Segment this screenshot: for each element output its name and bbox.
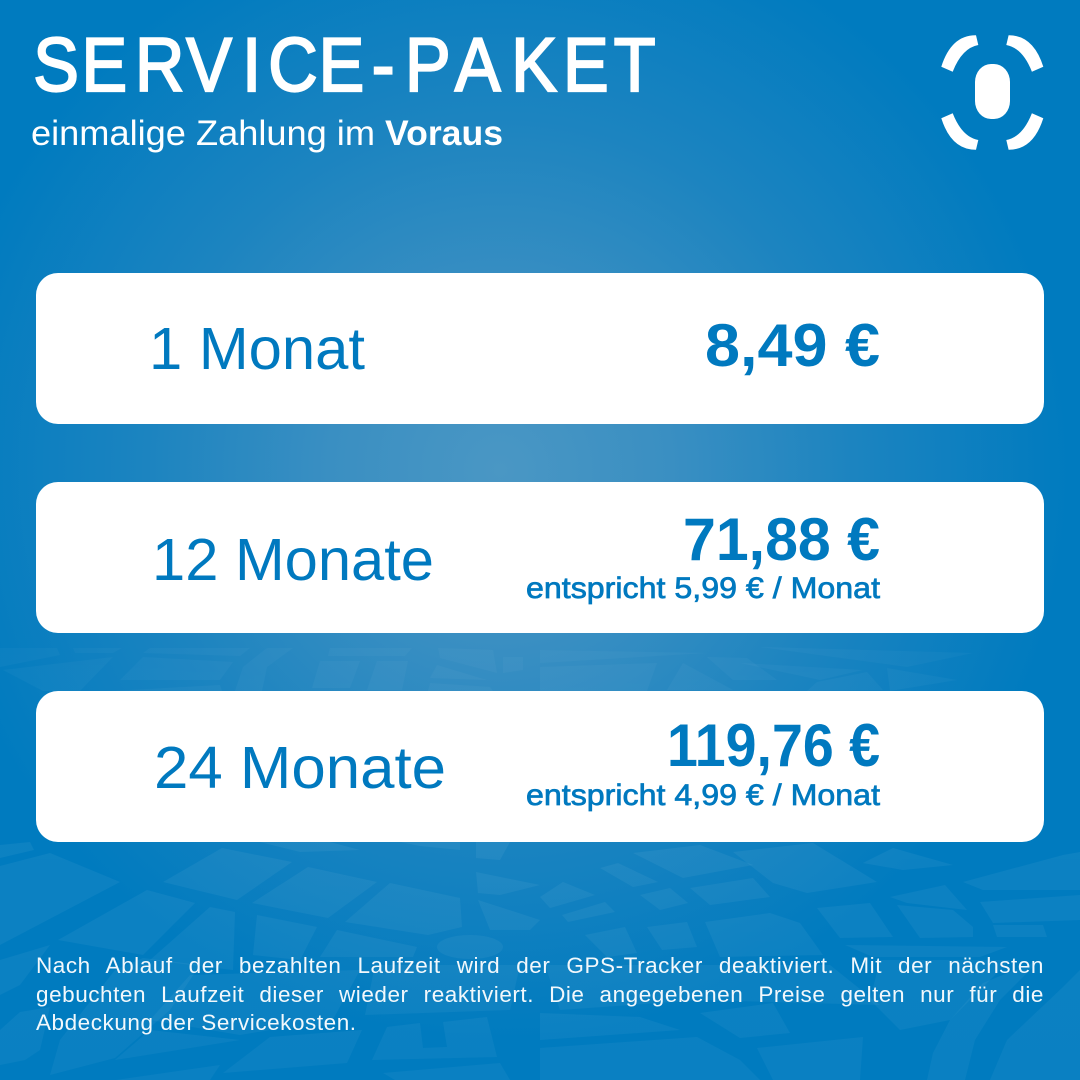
- panel: 12 Monate: [36, 482, 1044, 633]
- panel: 24 Monate: 119,76 €: [667, 712, 880, 779]
- panel: 24 Monate: [36, 691, 1044, 842]
- panel: 24 Monate: entspricht 4,99 € / Monat: [526, 779, 880, 812]
- street map pattern: [0, 647, 1080, 1080]
- panel: 24 Monate: 24 Monate: [154, 735, 446, 801]
- subtitle: Voraus: [385, 114, 503, 153]
- footer note: [36, 953, 1044, 1035]
- footer note: Nach Ablauf der bezahlten Laufzeit wird der GPS-Tracker deaktiviert. Mit der nächsten: [36, 953, 1044, 978]
- panel: 1 Monat: 1 Monat: [149, 316, 365, 382]
- icon: tracker logo: [941, 35, 1043, 150]
- panel: 12 Monate: 71,88 €: [683, 506, 880, 573]
- panel: 1 Monat: 8,49 €: [705, 312, 880, 379]
- panel: 1 Monat: [36, 273, 1044, 424]
- panel: 12 Monate: entspricht 5,99 € / Monat: [526, 572, 880, 605]
- footer note: Abdeckung der Servicekosten.: [36, 1010, 357, 1035]
- footer note: gebuchten Laufzeit dieser wieder reaktiviert. Die angegebenen Preise gelten nur für die: [36, 982, 1044, 1006]
- subtitle: einmalige Zahlung im: [31, 114, 375, 153]
- panel: 12 Monate: 12 Monate: [152, 527, 434, 593]
- title: SERVICE-PAKET: [33, 24, 656, 108]
